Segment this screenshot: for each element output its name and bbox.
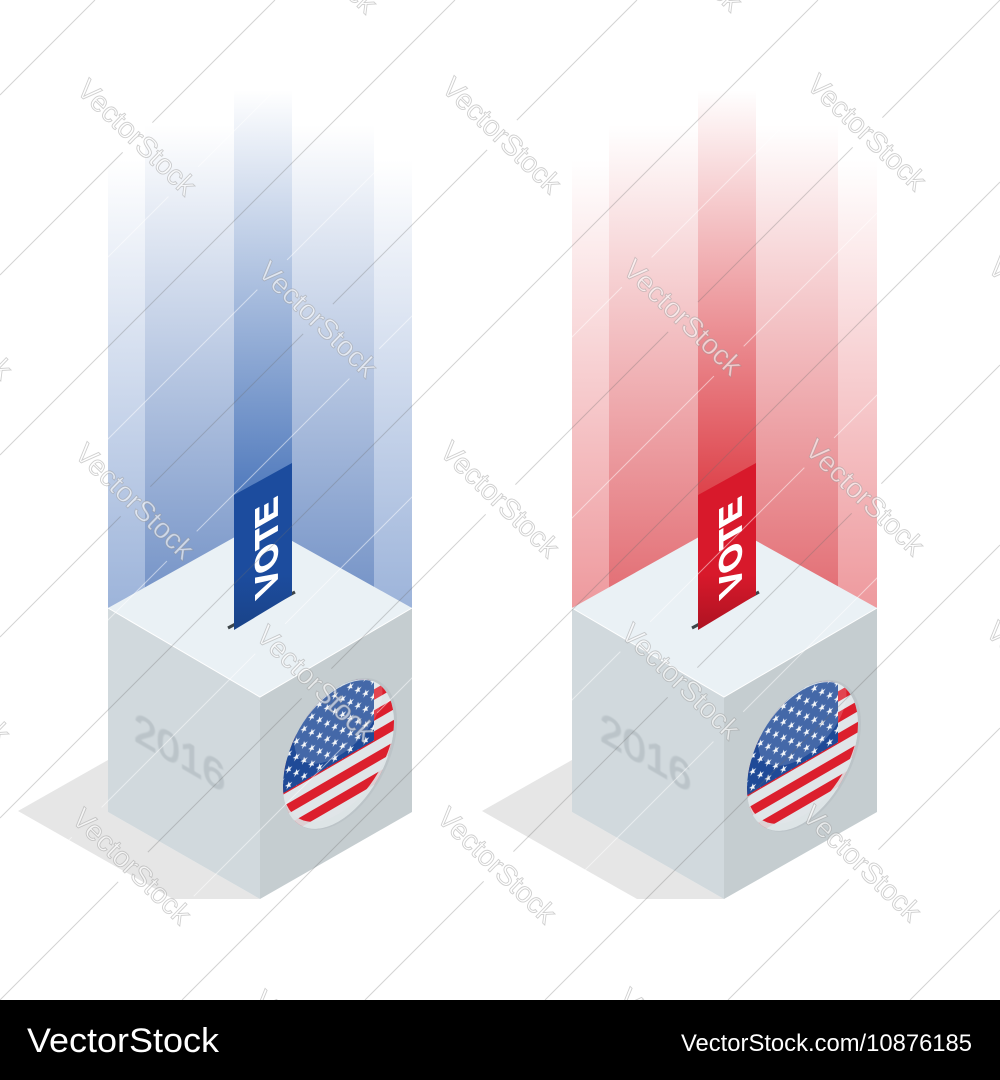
watermark text grid: VectorStock [430, 801, 563, 931]
blue box top front edge highlight [108, 608, 412, 697]
red box left face [572, 608, 724, 899]
red box year 2016: 2016 [600, 704, 691, 802]
red box top front edge highlight [572, 608, 877, 697]
watermark text grid: VectorStock [798, 433, 931, 563]
blue ballot VOTE label: VOTE [249, 491, 285, 604]
blue box ballot slot [228, 592, 295, 628]
red box ground shadow [482, 760, 724, 899]
blue ballot paper [234, 463, 292, 630]
watermark text grid: VectorStock [68, 437, 201, 567]
red box flag badge [747, 680, 861, 832]
red ballot paper [698, 463, 756, 630]
watermark text grid: VectorStock [614, 617, 747, 747]
watermark text grid: VectorStock [65, 802, 198, 932]
blue box left face [108, 608, 260, 899]
footer logo text: VectorStock [27, 1022, 220, 1060]
red box right face [724, 608, 877, 899]
watermark text grid: VectorStock [249, 619, 382, 749]
footer bar [0, 1000, 1000, 1080]
watermark text grid: VectorStock [70, 73, 203, 203]
watermark text grid: VectorStock [251, 255, 384, 385]
red ballot VOTE label: VOTE [713, 491, 749, 604]
red box top face [572, 523, 877, 697]
red light beams [572, 90, 877, 612]
watermark text grid: VectorStock [800, 68, 933, 198]
watermark text grid: VectorStock [795, 799, 928, 929]
watermark text grid: VectorStock [435, 71, 568, 201]
blue box year 2016: 2016 [134, 704, 225, 802]
footer image id text: VectorStock.com/10876185 [681, 1030, 972, 1057]
blue box top face [108, 523, 412, 697]
red box ballot slot [692, 592, 759, 628]
watermark text grid: VectorStock [433, 435, 566, 565]
blue ballot box [18, 90, 412, 899]
red ballot box [482, 90, 877, 899]
blue box right face [260, 608, 412, 899]
blue light beams [108, 90, 412, 612]
blue box flag badge [283, 678, 397, 830]
watermark text grid: VectorStock [616, 253, 749, 383]
blue box ground shadow [18, 760, 260, 899]
